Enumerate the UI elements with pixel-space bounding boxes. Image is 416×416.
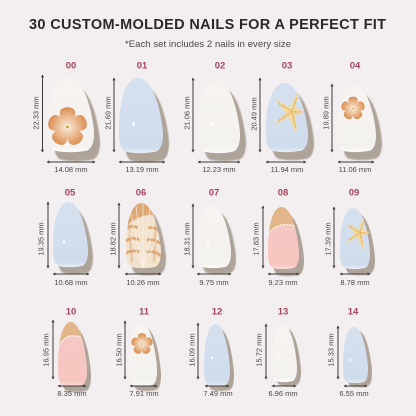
nail 13: white: 6.96 mm bbox=[268, 389, 298, 398]
nail 03: blue with starfish: 03 bbox=[282, 60, 292, 72]
nail 06: seashell pattern bbox=[109, 188, 166, 287]
nail 03: blue with starfish: 20.49 mm bbox=[250, 97, 259, 131]
nail 08: pink with shell tip bbox=[252, 188, 304, 287]
nail 11: white with flower: 7.91 mm bbox=[129, 389, 159, 398]
nail 04: white with flower: 04 bbox=[350, 60, 361, 72]
nail 06: seashell pattern: 10.26 mm bbox=[126, 278, 160, 287]
nail 00: white with flower bbox=[32, 60, 100, 174]
nail 14: blue: 15.33 mm bbox=[327, 333, 336, 367]
nail 09: blue with starfish: 17.39 mm bbox=[324, 222, 333, 256]
nail 08: pink with shell tip: 17.83 mm bbox=[252, 222, 261, 256]
nail 02: white bbox=[183, 60, 246, 174]
nail 01: blue bbox=[104, 60, 169, 174]
nail 09: blue with starfish: 8.78 mm bbox=[340, 278, 370, 287]
shell tip bbox=[58, 322, 82, 348]
nail 03: blue with starfish bbox=[250, 60, 314, 174]
nail 13: white: 15.72 mm bbox=[255, 333, 264, 367]
nail 02: white: 21.06 mm bbox=[183, 96, 192, 130]
nail 01: blue: 01 bbox=[137, 60, 148, 72]
nail 04: white with flower bbox=[322, 60, 382, 174]
nail 10: pink with shell tip: 16.95 mm bbox=[42, 333, 51, 367]
icon: flower bbox=[46, 107, 89, 148]
nail 07: white: 07 bbox=[209, 188, 219, 198]
nail 14: blue: 6.55 mm bbox=[339, 389, 369, 398]
nail 05: blue bbox=[37, 188, 93, 287]
nail 14: blue: 14 bbox=[348, 306, 359, 318]
nail 06: seashell pattern: 18.82 mm bbox=[109, 222, 118, 256]
nail 00: white with flower: 14.08 mm bbox=[54, 165, 88, 174]
title: 30 CUSTOM-MOLDED NAILS FOR A PERFECT FIT bbox=[29, 17, 386, 33]
nail 07: white: 9.75 mm bbox=[199, 278, 229, 287]
nail 03: blue with starfish: 11.94 mm bbox=[271, 165, 303, 174]
nail 10: pink with shell tip bbox=[42, 306, 91, 398]
icon: starfish bbox=[345, 217, 370, 250]
nail 06: seashell pattern: 06 bbox=[136, 188, 146, 198]
icon: flower bbox=[340, 97, 366, 121]
nail 11: white with flower bbox=[115, 306, 161, 398]
nail 07: white bbox=[183, 188, 236, 287]
nail 04: white with flower: 11.06 mm bbox=[339, 165, 371, 174]
nail 14: blue bbox=[327, 306, 372, 398]
nail 02: white: 02 bbox=[215, 60, 225, 72]
icon: starfish bbox=[274, 92, 304, 134]
nail 04: white with flower: 19.89 mm bbox=[322, 96, 331, 130]
nail 05: blue: 10.68 mm bbox=[54, 278, 88, 287]
nail 13: white: 13 bbox=[278, 306, 288, 318]
nail 11: white with flower: 11 bbox=[139, 306, 150, 318]
shell stripes bbox=[126, 203, 161, 268]
nail 08: pink with shell tip: 08 bbox=[278, 188, 288, 198]
nail 13: white bbox=[255, 306, 301, 398]
subtitle: *Each set includes 2 nails in every size bbox=[125, 39, 291, 50]
nail 05: blue: 05 bbox=[65, 188, 76, 198]
shell tip bbox=[268, 207, 295, 234]
nail 09: blue with starfish: 09 bbox=[349, 188, 359, 198]
nail 01: blue: 13.19 mm bbox=[125, 165, 159, 174]
icon: flower bbox=[130, 333, 154, 355]
nail 10: pink with shell tip: 10 bbox=[66, 306, 76, 318]
nail 11: white with flower: 16.50 mm bbox=[115, 333, 124, 367]
nail 12: blue bbox=[188, 306, 234, 398]
nail 09: blue with starfish bbox=[324, 188, 375, 287]
nail 00: white with flower: 22.33 mm bbox=[32, 96, 41, 130]
nail 01: blue: 21.69 mm bbox=[104, 96, 113, 130]
nail 02: white: 12.23 mm bbox=[202, 165, 236, 174]
nail 08: pink with shell tip: 9.23 mm bbox=[268, 278, 298, 287]
nail 12: blue: 7.49 mm bbox=[203, 389, 233, 398]
nail 12: blue: 16.09 mm bbox=[188, 333, 197, 367]
nail 07: white: 18.31 mm bbox=[183, 222, 192, 256]
nail 00: white with flower: 00 bbox=[66, 60, 76, 72]
nail 12: blue: 12 bbox=[212, 306, 222, 318]
nail 05: blue: 19.35 mm bbox=[37, 222, 46, 256]
nail 10: pink with shell tip: 8.35 mm bbox=[57, 389, 87, 398]
